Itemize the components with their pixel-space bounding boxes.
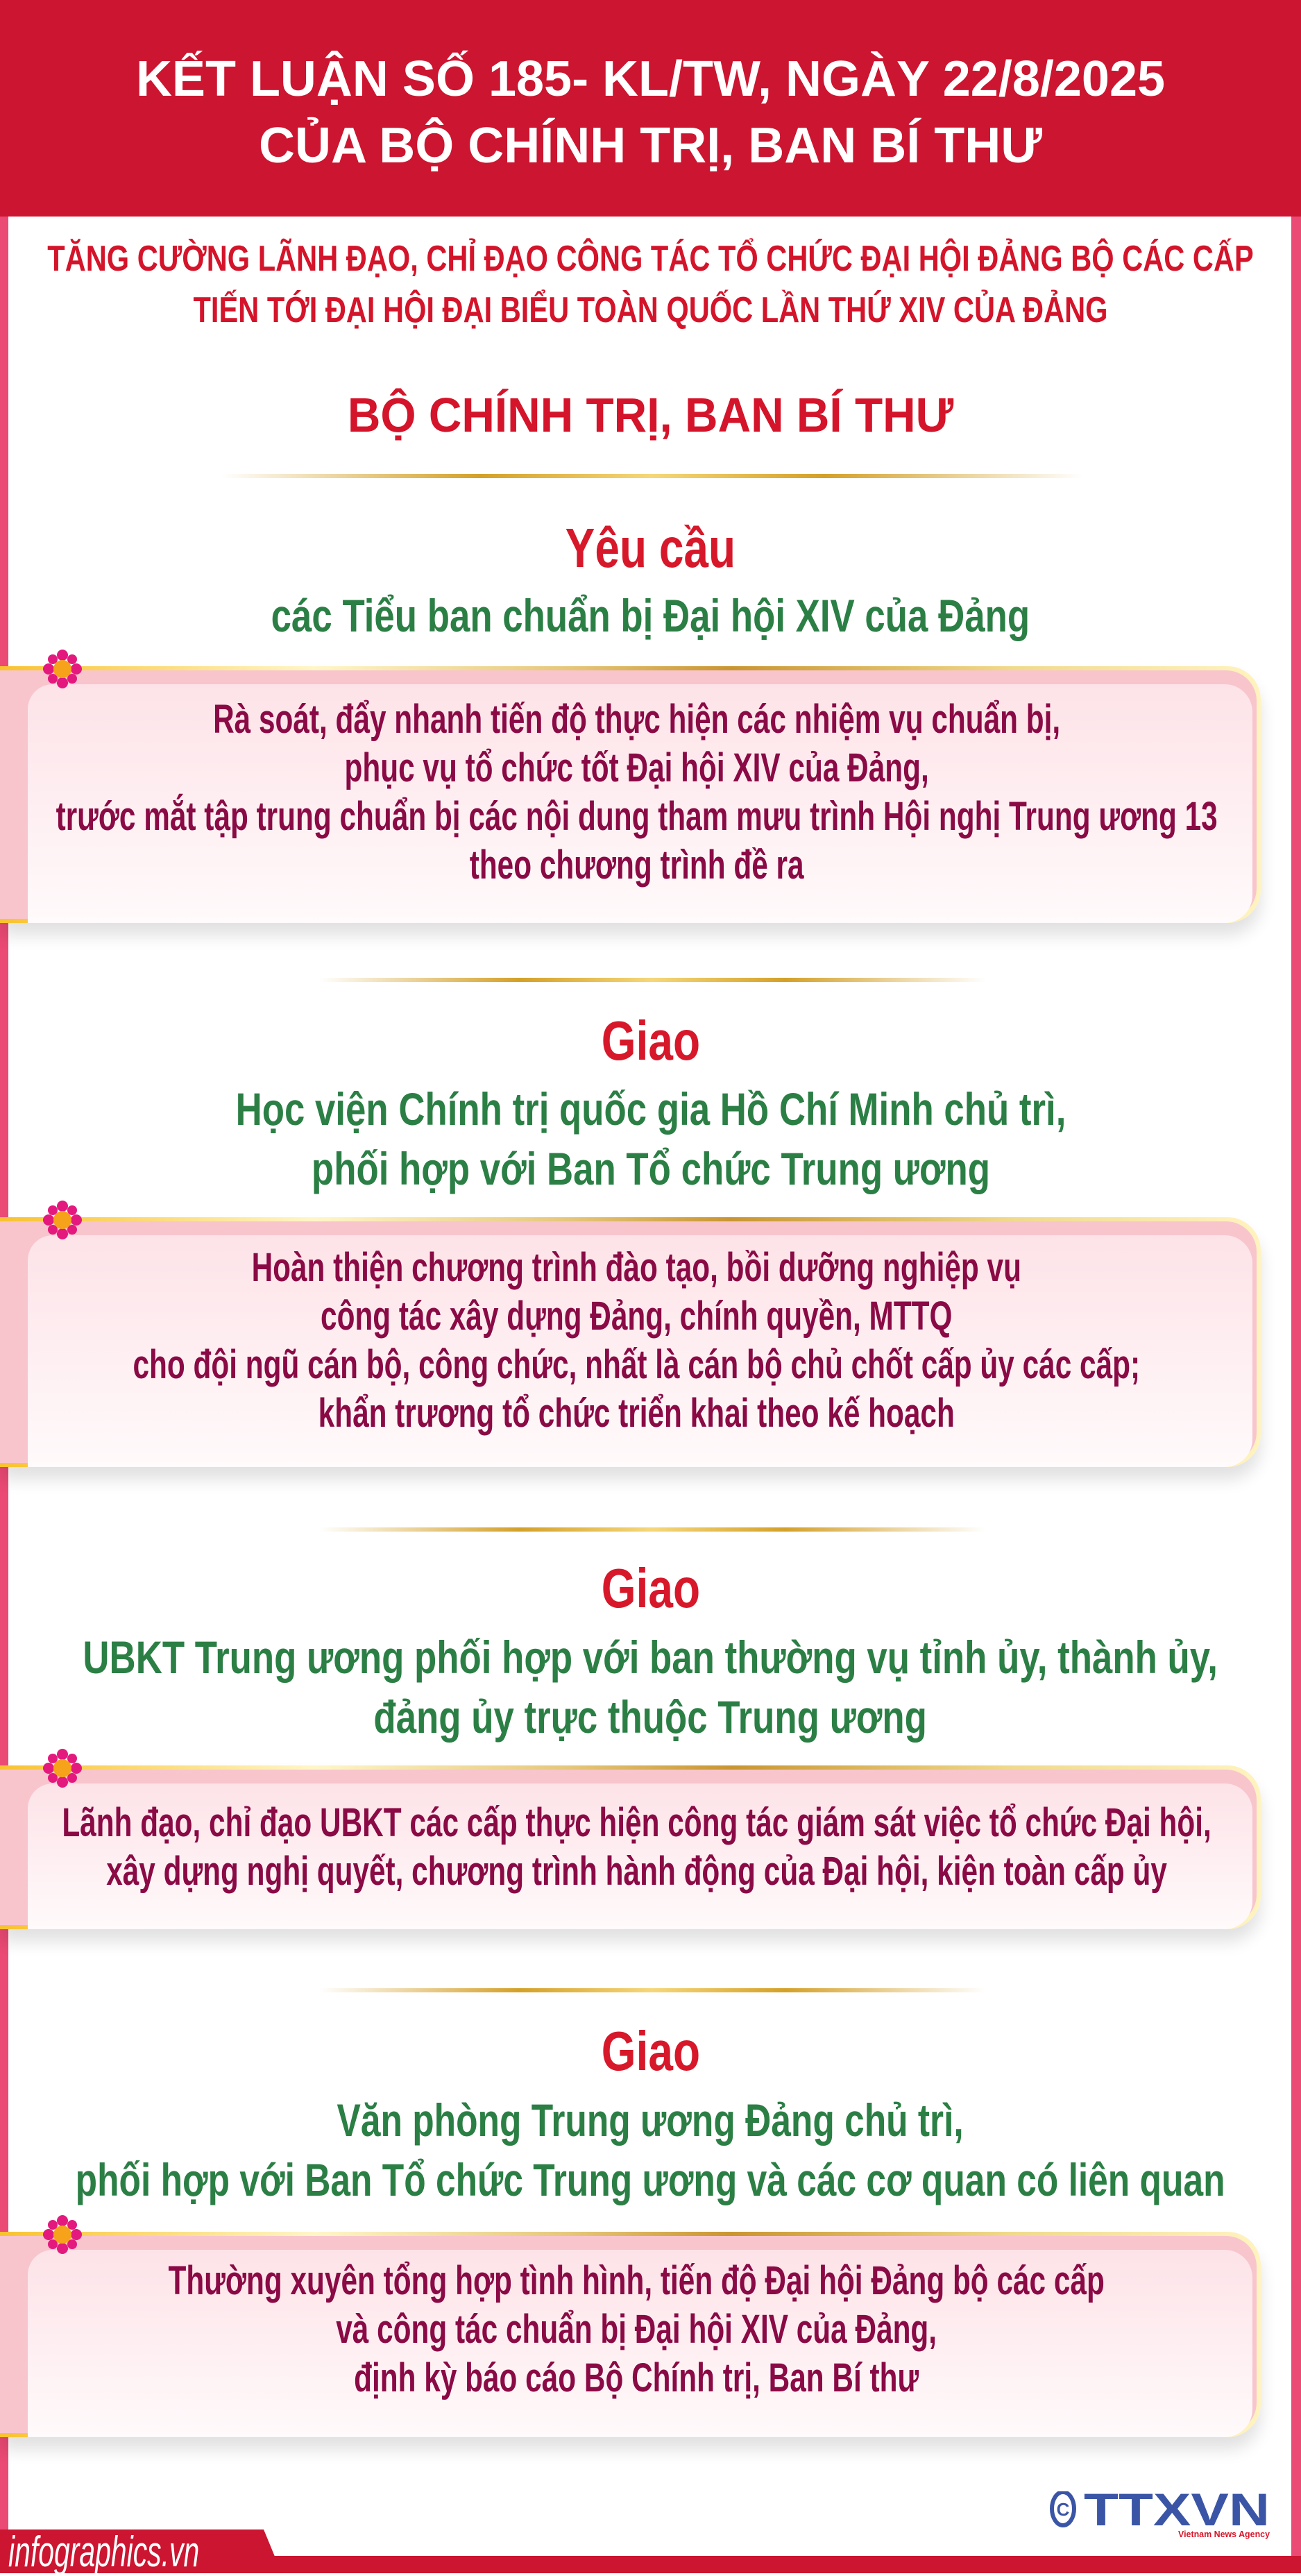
- heading: Bộ Chính trị: BỘ CHÍNH TRỊ, BAN BÍ THƯ: [348, 388, 953, 442]
- text 2: Hoàn thiện chương trình đào tạo, bồi dưỡng nghiệp vụ: [252, 1245, 1021, 1290]
- text 1: theo chương trình đề ra: [470, 842, 803, 888]
- section 1 heading: Yêu cầu: [566, 517, 735, 579]
- title: KẾT LUẬN SỐ 185- KL/TW, NGÀY 22/8/2025: [136, 51, 1165, 107]
- text 1: trước mắt tập trung chuẩn bị các nội dung tham mưu trình Hội nghị Trung ương 13: [56, 794, 1218, 839]
- icon: flower 1: [43, 650, 82, 688]
- section 4 heading: Giao: [601, 2020, 700, 2082]
- icon: flower 2: [43, 1201, 82, 1239]
- footer tab: infographics.vn: infographics.vn: [8, 2528, 199, 2576]
- footer bar: [0, 2556, 1301, 2573]
- text 2: cho đội ngũ cán bộ, công chức, nhất là cán bộ chủ chốt cấp ủy các cấp;: [133, 1342, 1140, 1387]
- subtitle: [47, 238, 1254, 330]
- footer tab: infographics.vn: [0, 2530, 282, 2573]
- icon: flower 4: [43, 2215, 82, 2254]
- text 3: [62, 1800, 1211, 1894]
- panel 3: [0, 1765, 1261, 1929]
- text: Học viện Chính trị quốc gia Hồ Chí Minh chủ trì,: [235, 1083, 1066, 1135]
- header banner: [0, 0, 1301, 217]
- text: UBKT Trung ương phối hợp với ban thường vụ tỉnh ủy, thành ủy,: [83, 1632, 1218, 1683]
- panel 2: [0, 1217, 1261, 1467]
- text 2: [133, 1245, 1140, 1436]
- text 4: định kỳ báo cáo Bộ Chính trị, Ban Bí thư: [355, 2355, 919, 2400]
- panel 1: [0, 666, 1261, 923]
- text: đảng ủy trực thuộc Trung ương: [374, 1691, 927, 1743]
- text 1: Rà soát, đẩy nhanh tiến độ thực hiện các nhiệm vụ chuẩn bị,: [213, 697, 1060, 742]
- logo: TTXVN: [1050, 2491, 1270, 2539]
- text: Văn phòng Trung ương Đảng chủ trì,: [337, 2094, 964, 2146]
- text: các Tiểu ban chuẩn bị Đại hội XIV của Đảng: [271, 590, 1030, 641]
- logo: TTXVN: C: [1057, 2499, 1070, 2520]
- text 4: [168, 2258, 1105, 2400]
- title: CỦA BỘ CHÍNH TRỊ, BAN BÍ THƯ: [259, 118, 1042, 173]
- title: [136, 50, 1165, 173]
- side borders: [0, 0, 8, 2573]
- text 1: phục vụ tổ chức tốt Đại hội XIV của Đảng,: [344, 745, 929, 790]
- panel 4: [0, 2232, 1261, 2437]
- text 2: khẩn trương tổ chức triển khai theo kế hoạch: [318, 1391, 955, 1436]
- icon: flower 3: [43, 1749, 82, 1788]
- text: phối hợp với Ban Tổ chức Trung ương: [311, 1143, 990, 1194]
- logo: TTXVN: Vietnam News Agency: [1178, 2529, 1270, 2539]
- text 4: và công tác chuẩn bị Đại hội XIV của Đảng,: [337, 2307, 937, 2352]
- text 3: xây dựng nghị quyết, chương trình hành động của Đại hội, kiện toàn cấp ủy: [106, 1849, 1167, 1894]
- section 3 heading: Giao: [601, 1557, 700, 1619]
- text 1: [56, 697, 1218, 888]
- text 3: Lãnh đạo, chỉ đạo UBKT các cấp thực hiện công tác giám sát việc tổ chức Đại hội,: [62, 1800, 1211, 1845]
- subtitle: TIẾN TỚI ĐẠI HỘI ĐẠI BIỂU TOÀN QUỐC LẦN THỨ XIV CỦA ĐẢNG: [193, 290, 1108, 330]
- section 2 heading: Giao: [601, 1010, 700, 1071]
- text 2: công tác xây dựng Đảng, chính quyền, MTTQ: [321, 1294, 953, 1339]
- text: phối hợp với Ban Tổ chức Trung ương và các cơ quan có liên quan: [76, 2154, 1225, 2205]
- subtitle: TĂNG CƯỜNG LÃNH ĐẠO, CHỈ ĐẠO CÔNG TÁC TỔ CHỨC ĐẠI HỘI ĐẢNG BỘ CÁC CẤP: [47, 239, 1254, 279]
- text 4: Thường xuyên tổng hợp tình hình, tiến độ Đại hội Đảng bộ các cấp: [169, 2258, 1105, 2303]
